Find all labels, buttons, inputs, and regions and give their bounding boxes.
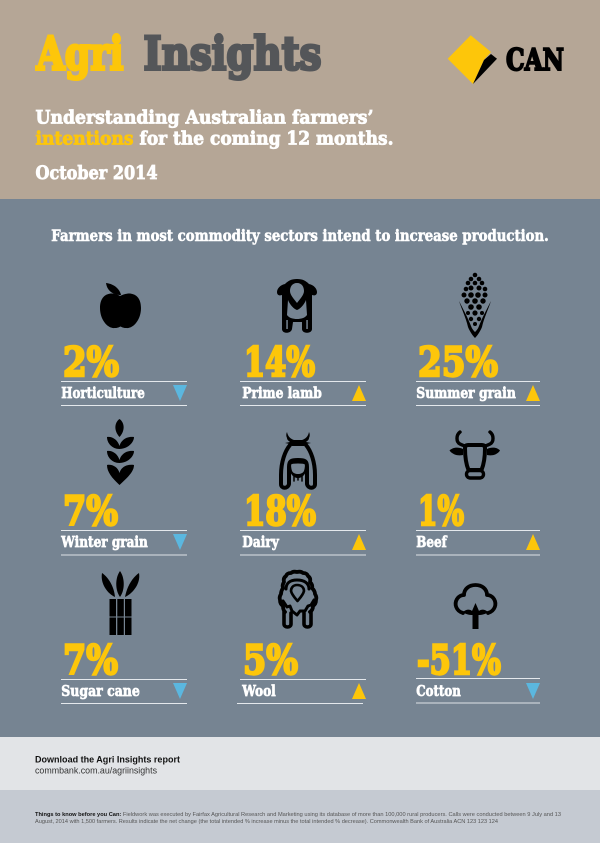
arrow: up — [352, 534, 366, 550]
value: 7% — [63, 488, 118, 535]
title: Insights — [144, 26, 322, 80]
label: Beef — [416, 534, 448, 551]
disclaimer text: August, 2014 with 1,500 farmers. Results indicate the net change (the total intended % increase minus the total intended % decrease). Commonwealth Bank of Australia ACN 123 123 124 — [35, 819, 498, 825]
subheading — [36, 108, 394, 150]
sector: Wool — [237, 572, 366, 704]
icon: woolly sheep — [280, 572, 316, 627]
sector: Sugar cane — [61, 571, 187, 704]
value: 5% — [243, 637, 298, 684]
icon: corn — [459, 273, 491, 338]
arrow: down — [173, 534, 187, 550]
arrow: down — [526, 683, 540, 699]
label: Cotton — [416, 683, 461, 700]
download url: commbank.com.au/agriinsights — [35, 766, 157, 776]
arrow: up — [352, 385, 366, 401]
value: -51% — [417, 637, 501, 684]
value: 1% — [418, 488, 464, 535]
label: Sugar cane — [61, 683, 140, 700]
icon: cattle head — [450, 432, 500, 478]
date: October 2014 — [36, 163, 158, 184]
disclaimer text — [35, 812, 561, 825]
logo: CAN diamond: CAN — [506, 43, 564, 78]
label: Horticulture — [61, 385, 145, 402]
sector: Prime lamb — [240, 279, 366, 406]
arrow: down — [173, 385, 187, 401]
subheading: intentions — [36, 129, 134, 150]
icon: sugar cane — [102, 571, 139, 635]
arrow: up — [352, 683, 366, 699]
arrow: down — [173, 683, 187, 699]
title — [36, 26, 321, 80]
subheading: for the coming 12 months. — [140, 129, 394, 150]
sector: Dairy — [240, 432, 366, 555]
label: Winter grain — [60, 534, 148, 551]
label: Wool — [241, 683, 276, 700]
icon: dairy cow — [281, 432, 315, 488]
label: Prime lamb — [242, 385, 322, 402]
label: Dairy — [242, 534, 279, 551]
label: Summer grain — [416, 385, 516, 402]
sector: Beef — [416, 432, 540, 555]
arrow: up — [526, 534, 540, 550]
download heading: Download the Agri Insights report — [35, 754, 181, 766]
icon: wheat — [107, 419, 134, 485]
sector: Winter grain — [60, 419, 187, 555]
icon: cotton — [456, 585, 495, 629]
value: 7% — [63, 637, 118, 684]
icon: apple — [100, 283, 141, 328]
disclaimer text: Things to know before you Can: Fieldwork was executed by Fairfax Agricultural Research and Marketing using its database of more than 100,000 rural producers. Calls were conducted between 9 July and 13 — [35, 812, 561, 818]
icon: lamb — [277, 279, 317, 333]
panel: commodity sectors — [0, 199, 600, 737]
value: 2% — [63, 339, 119, 386]
panel: disclaimer — [0, 790, 600, 843]
sector: Summer grain — [416, 273, 540, 406]
panel: download — [0, 737, 600, 790]
title: Agri — [36, 26, 124, 80]
sector: Horticulture — [61, 283, 187, 406]
value: 25% — [418, 339, 498, 386]
sector: Cotton — [416, 585, 540, 703]
logo: CAN diamond — [448, 35, 564, 84]
value: 14% — [244, 339, 315, 386]
panel: header — [0, 0, 600, 199]
arrow: up — [526, 385, 540, 401]
value: 18% — [244, 488, 316, 535]
subheading: Understanding Australian farmers’ — [36, 108, 374, 129]
